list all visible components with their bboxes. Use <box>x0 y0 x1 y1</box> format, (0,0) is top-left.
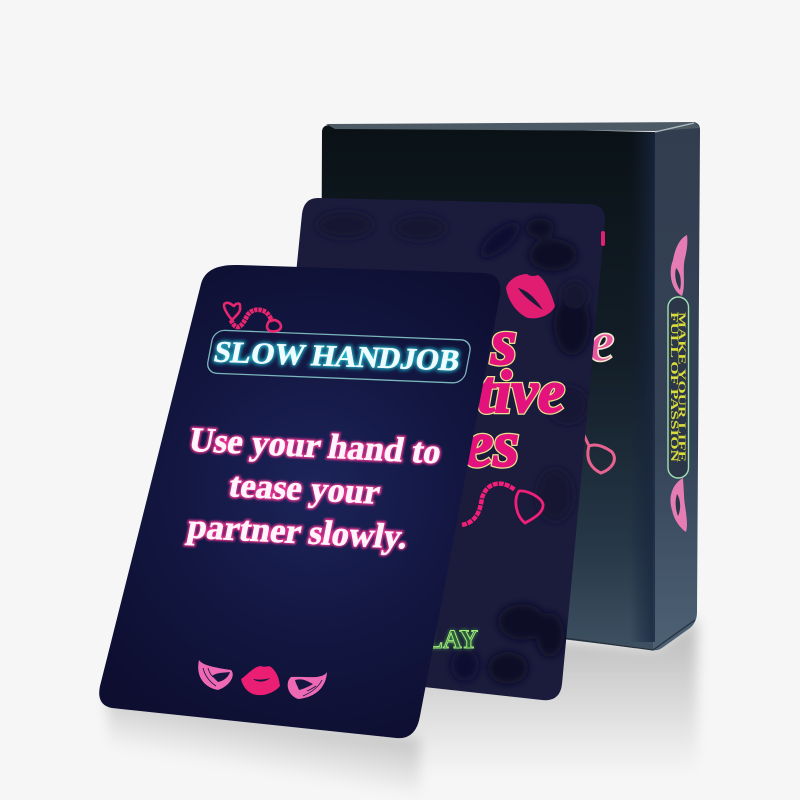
body text: partner slowly. <box>184 507 412 556</box>
footer wings and lips icon <box>198 660 327 699</box>
title plate <box>206 330 472 383</box>
center lips <box>241 666 280 695</box>
box side wing bottom <box>670 478 687 532</box>
box top edge <box>326 122 700 131</box>
cover green label: LAY <box>425 625 478 654</box>
body text: Use your hand to <box>186 420 445 471</box>
handcuffs icon <box>224 303 281 331</box>
title text: SLOW HANDJOB <box>211 335 463 377</box>
cover green label: LAY <box>425 625 478 654</box>
title text: SLOW HANDJOB <box>211 335 463 377</box>
box side label pill <box>668 297 688 478</box>
floor shadows <box>106 618 697 795</box>
pink corner mark <box>601 231 605 246</box>
cover title fragments: tive <box>478 359 565 425</box>
cover title fragments: es <box>464 408 519 481</box>
body text: tease your <box>226 465 384 512</box>
box side tagline: FULL OF PASSION <box>668 312 679 463</box>
body text: tease your <box>226 465 384 512</box>
cover title fragments <box>464 306 565 481</box>
box front artwork: letter e: e <box>589 309 615 374</box>
box side tagline: MAKE YOUR LIFE <box>676 312 686 463</box>
cover title fragments: s <box>490 306 517 379</box>
body text: Use your hand to <box>186 420 445 471</box>
cover title fragments: es <box>464 408 519 481</box>
box side panel <box>653 122 700 650</box>
body text <box>169 420 445 557</box>
cover title fragments: s <box>490 306 517 379</box>
front card <box>99 265 500 738</box>
leopard pattern <box>317 212 590 684</box>
box side wing top <box>671 235 687 296</box>
body text: partner slowly. <box>184 507 412 556</box>
middle card <box>296 198 605 700</box>
box front panel <box>320 125 655 650</box>
box side tagline <box>668 312 686 463</box>
lips icon <box>506 274 555 318</box>
box front artwork: heart cuff <box>583 433 614 473</box>
cover title fragments: tive <box>478 359 565 425</box>
right wing <box>288 672 327 699</box>
chain and heart icon <box>462 484 543 525</box>
box <box>320 122 700 650</box>
left wing <box>198 660 233 690</box>
